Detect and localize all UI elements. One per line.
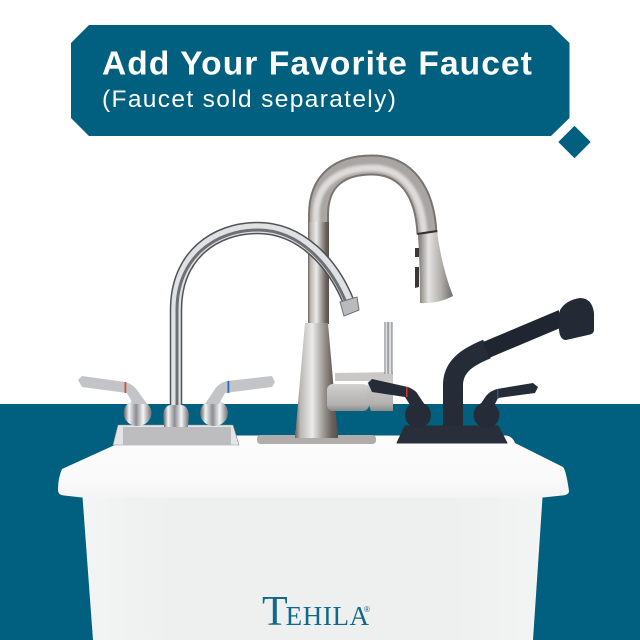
chrome spout tip: [340, 297, 359, 316]
right chrome handle: [200, 376, 275, 426]
spray head ring: [417, 230, 438, 235]
right black handle: [474, 383, 538, 428]
hot marker: [406, 387, 408, 397]
left chrome handle: [78, 376, 152, 426]
sink rim: [58, 436, 569, 498]
brand logo: TEHILA: [262, 589, 370, 635]
left handle ball: [124, 400, 152, 426]
decorative diamond: [559, 126, 590, 158]
black hose: [486, 318, 562, 350]
steel handle collar: [366, 381, 393, 411]
steel cone body: [295, 323, 338, 438]
black deck: [397, 426, 507, 443]
cold marker: [228, 381, 229, 393]
title heading: Add Your Favorite Faucet: [102, 46, 533, 82]
brushed steel pull-down faucet: [257, 165, 453, 444]
steel base plate: [257, 435, 376, 444]
black spray head: [559, 298, 594, 340]
black faucet: [368, 298, 594, 443]
right handle lever: [205, 376, 275, 404]
chrome center post: [163, 405, 189, 427]
teal background band: [0, 404, 640, 640]
left black handle: [368, 379, 431, 428]
chrome deck plate: [113, 425, 239, 445]
cold marker: [497, 389, 498, 399]
sink body: [82, 490, 543, 640]
title banner: [71, 25, 570, 136]
steel handle top plate: [335, 372, 393, 381]
right handle ball: [200, 400, 228, 426]
chrome deck inset: [123, 427, 231, 445]
chrome faucet: [78, 228, 359, 445]
left handle lever: [368, 379, 427, 408]
right handle lever: [478, 383, 538, 408]
steel riser: [308, 222, 329, 324]
steel cone foot: [295, 431, 338, 438]
hot marker: [124, 382, 126, 393]
chrome spout tube: [176, 228, 349, 405]
spray head: [418, 232, 453, 303]
utility sink: [58, 436, 569, 640]
spray buttons: [415, 248, 419, 288]
right handle ball: [474, 402, 500, 428]
steel lever: [384, 322, 392, 374]
left handle lever: [78, 376, 147, 404]
registered mark: ®: [364, 605, 370, 614]
steel handle cylinder: [327, 384, 369, 411]
subtitle: (Faucet sold separately): [102, 86, 397, 113]
left handle ball: [405, 402, 431, 428]
black riser: [453, 349, 487, 429]
steel arch: [316, 165, 427, 234]
